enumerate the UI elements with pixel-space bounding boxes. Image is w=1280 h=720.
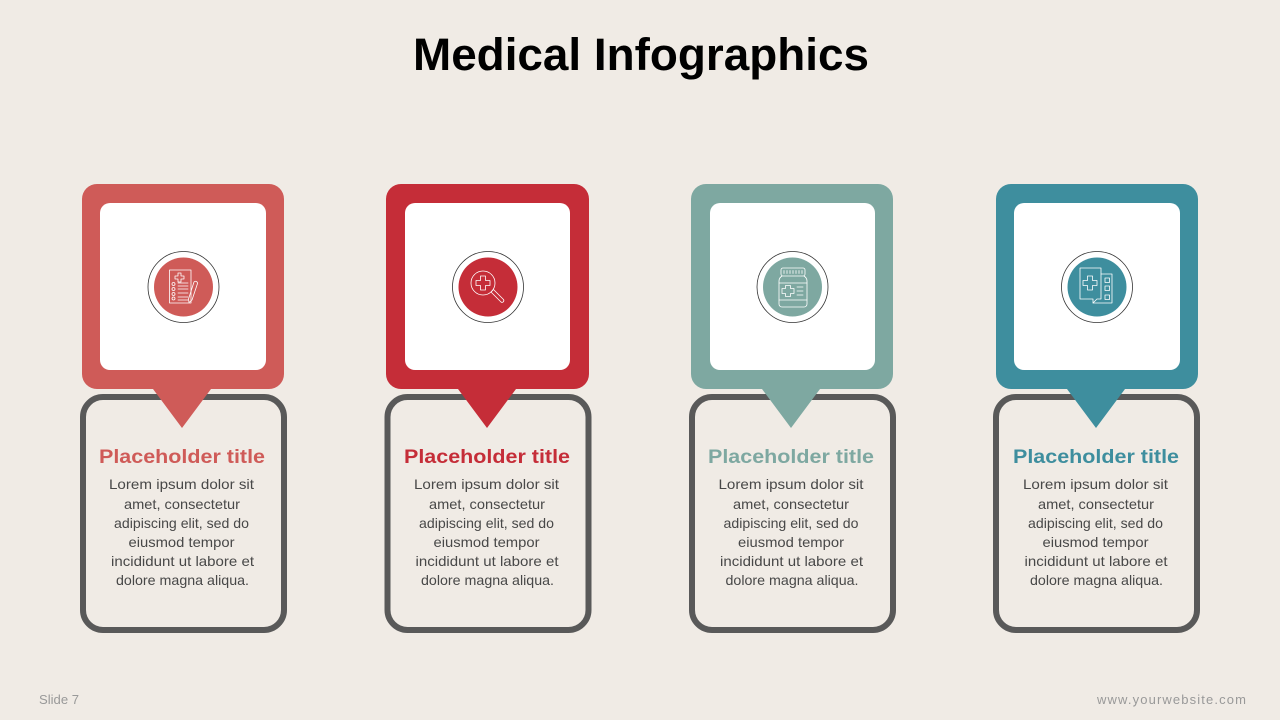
text box outline bbox=[692, 397, 893, 630]
card body text: eiusmod tempor bbox=[1042, 534, 1149, 550]
panel: card 4 bbox=[996, 184, 1198, 630]
card body text: Lorem ipsum dolor sit bbox=[1023, 476, 1168, 492]
card body text bbox=[109, 476, 254, 588]
card body text: dolore magna aliqua. bbox=[116, 572, 249, 588]
card body text: Lorem ipsum dolor sit bbox=[718, 476, 864, 492]
card body text: incididunt ut labore et bbox=[720, 553, 863, 569]
card body text: incididunt ut labore et bbox=[1024, 553, 1168, 569]
pin frame with pointer bbox=[82, 184, 284, 428]
text box outline bbox=[996, 397, 1197, 630]
card body text bbox=[414, 476, 559, 588]
footer: website: www.yourwebsite.com bbox=[1096, 692, 1246, 707]
card body text: Lorem ipsum dolor sit bbox=[109, 476, 254, 492]
card body text: eiusmod tempor bbox=[738, 534, 844, 550]
white icon panel bbox=[1014, 203, 1180, 370]
text box outline bbox=[388, 397, 588, 630]
card title: Placeholder title bbox=[1013, 446, 1179, 468]
text box outline bbox=[83, 397, 284, 630]
card body text: amet, consectetur bbox=[429, 496, 545, 512]
card body text: eiusmod tempor bbox=[128, 534, 235, 550]
card title: Placeholder title bbox=[708, 446, 874, 468]
panel: card 2 bbox=[386, 184, 589, 630]
card body text: amet, consectetur bbox=[733, 496, 849, 512]
pin frame with pointer bbox=[691, 184, 893, 428]
card body text: Lorem ipsum dolor sit bbox=[414, 476, 559, 492]
icon: magnifier with cross bbox=[452, 252, 524, 322]
card body text: amet, consectetur bbox=[1038, 496, 1154, 512]
card body text: adipiscing elit, sed do bbox=[1028, 515, 1163, 531]
card body text bbox=[718, 476, 864, 588]
icon: medicine bottle bbox=[757, 252, 828, 322]
card body text: dolore magna aliqua. bbox=[1030, 572, 1163, 588]
white icon panel bbox=[100, 203, 266, 370]
card body text: adipiscing elit, sed do bbox=[419, 515, 554, 531]
card body text: eiusmod tempor bbox=[434, 534, 540, 550]
title: Medical Infographics bbox=[413, 29, 869, 80]
white icon panel bbox=[405, 203, 570, 370]
card body text: amet, consectetur bbox=[124, 496, 240, 512]
icon: prescription and pills bbox=[1062, 252, 1132, 322]
card body text: dolore magna aliqua. bbox=[726, 572, 858, 588]
card body text: adipiscing elit, sed do bbox=[114, 515, 249, 531]
panel: card 1 bbox=[82, 184, 284, 630]
white icon panel bbox=[710, 203, 875, 370]
card body text: incididunt ut labore et bbox=[416, 553, 559, 569]
panel: card 3 bbox=[691, 184, 893, 630]
card body text: dolore magna aliqua. bbox=[421, 572, 554, 588]
card body text: adipiscing elit, sed do bbox=[724, 515, 859, 531]
card body text: incididunt ut labore et bbox=[111, 553, 254, 569]
pin frame with pointer bbox=[996, 184, 1198, 428]
card title: Placeholder title bbox=[404, 446, 570, 468]
card body text bbox=[1023, 476, 1168, 588]
card title: Placeholder title bbox=[99, 446, 265, 468]
footer: slide number: Slide 7 bbox=[39, 692, 79, 707]
icon: medical report bbox=[148, 252, 219, 322]
pin frame with pointer bbox=[386, 184, 589, 428]
